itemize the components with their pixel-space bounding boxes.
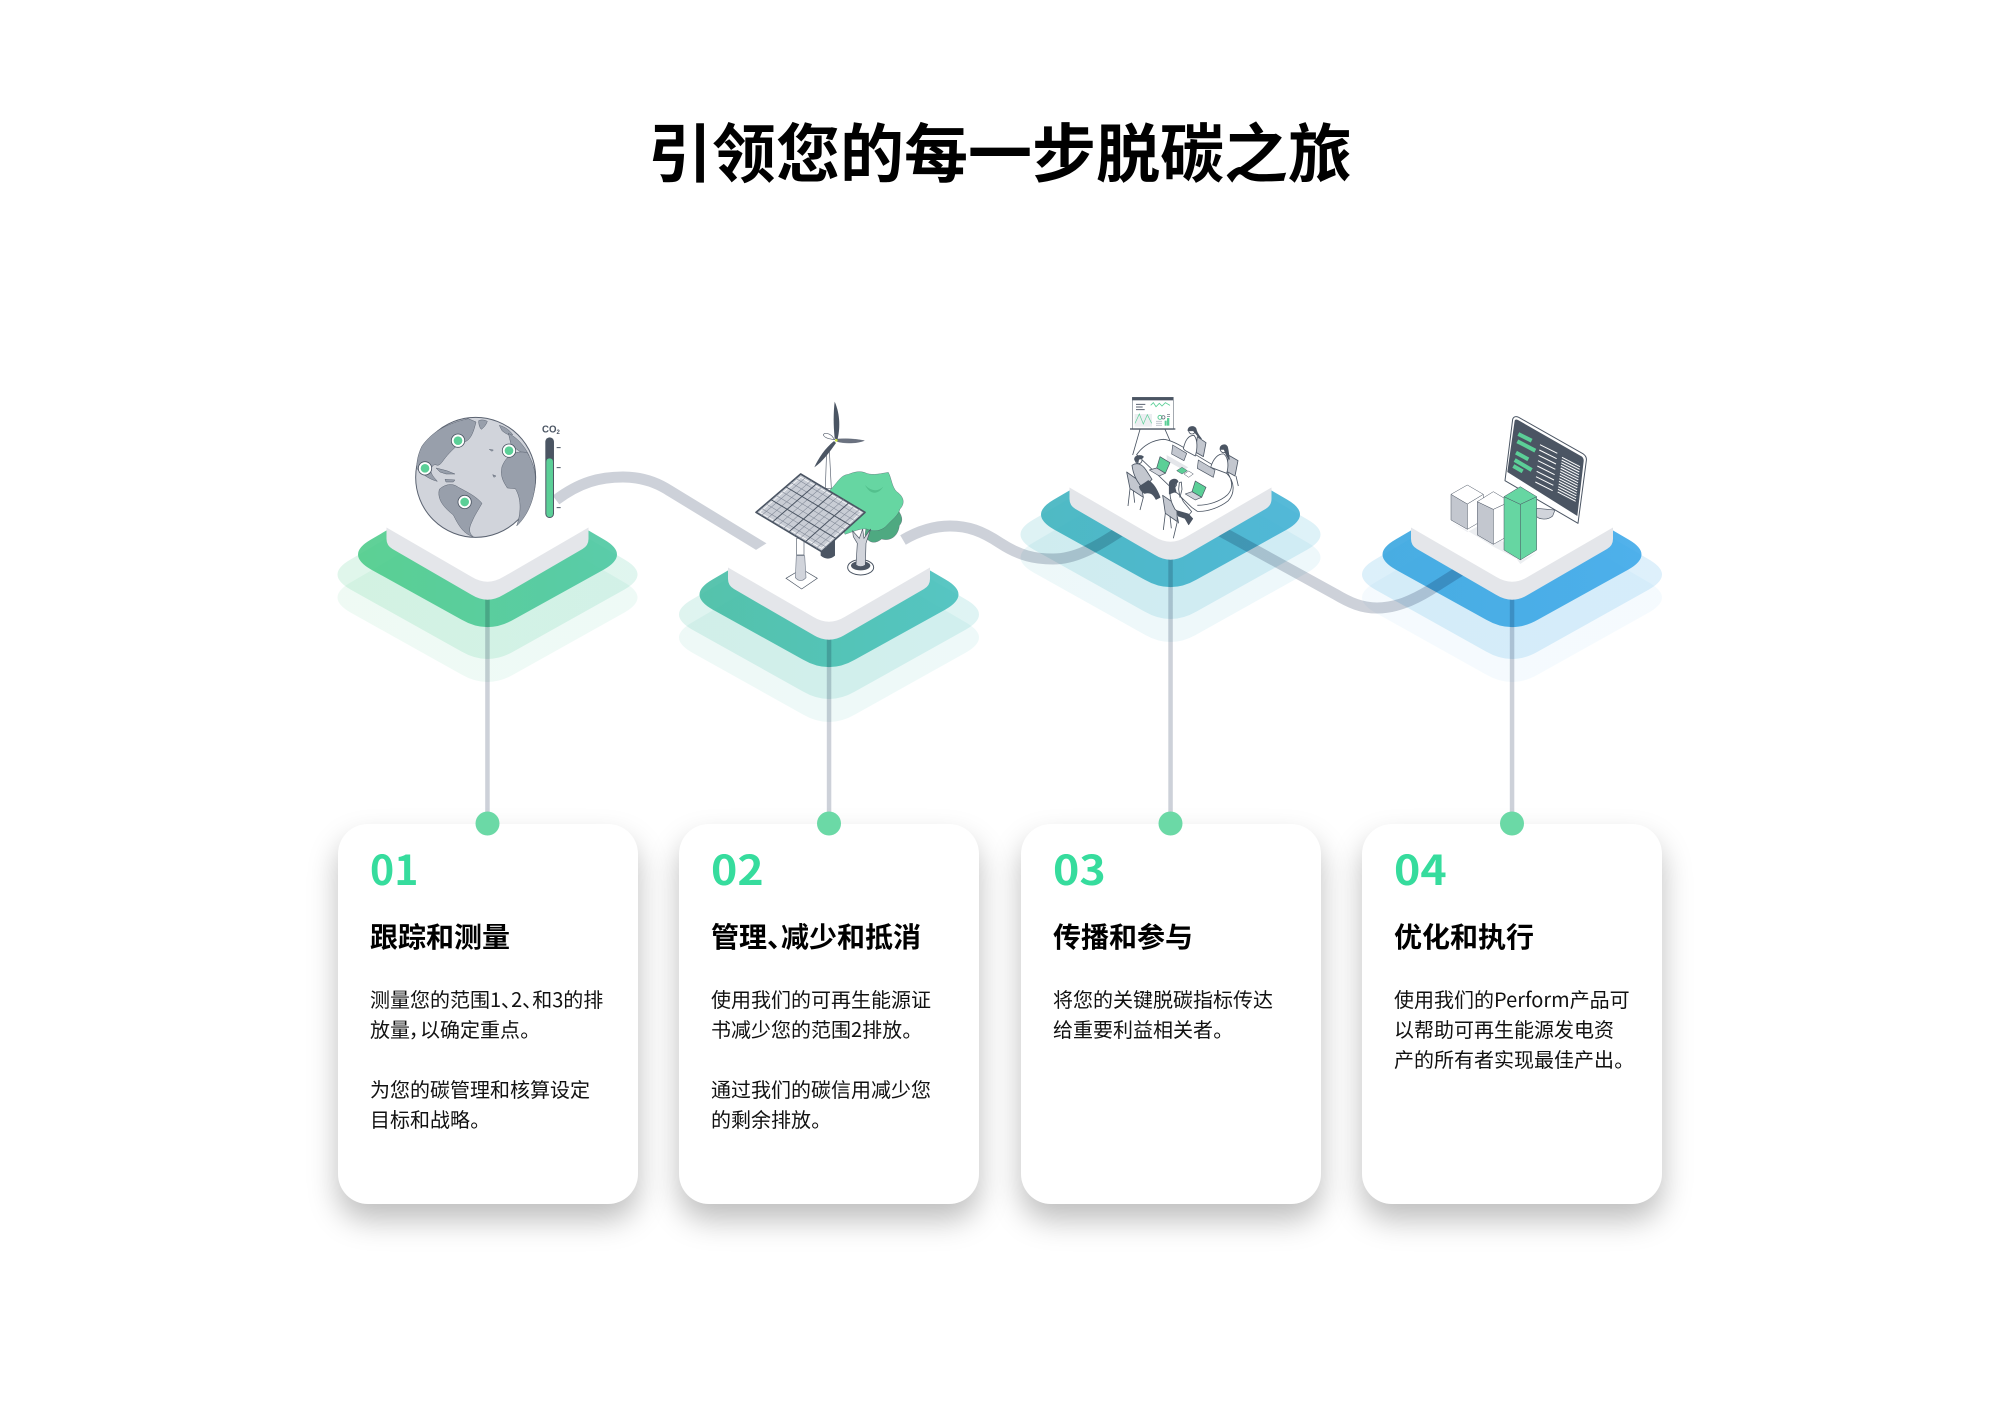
- step number 01: 01: [370, 837, 418, 897]
- step number 04: 04: [1394, 837, 1447, 897]
- chairs and people: [1127, 427, 1238, 538]
- step number 02: 02: [711, 837, 764, 897]
- platform base 4: [1362, 506, 1662, 682]
- bar 1: [1451, 485, 1483, 529]
- winding connector path between steps: [556, 477, 1490, 608]
- text block: step 04 description: 以帮助可再生能源发电资: [1394, 1014, 1614, 1043]
- platform top 3: [1070, 424, 1272, 560]
- panel: card 02: [679, 824, 979, 1204]
- step number 03: 03: [1053, 837, 1106, 897]
- text block: step 01 description: 测量您的范围1、2、和3的排: [370, 984, 603, 1013]
- turbine tower: [825, 450, 831, 488]
- monitor stand: [1537, 508, 1555, 519]
- platform base 3: [1020, 466, 1320, 642]
- title: 引领您的每一步脱碳之旅: [648, 104, 1352, 196]
- text block: step 01 description: [370, 984, 603, 1133]
- heading: communicate and engage: 传播和参与: [1053, 916, 1193, 956]
- heading: manage, reduce and offset: 管理、减少和抵消: [711, 916, 921, 956]
- solar stand: [786, 569, 817, 589]
- text block: step 04 description: 使用我们的Perform产品可: [1394, 984, 1630, 1013]
- node dot 1: [476, 812, 500, 836]
- notebooks on table: [1177, 467, 1193, 477]
- gauge: [545, 437, 561, 518]
- bar 2: [1477, 492, 1510, 544]
- text block: step 04 description: 产的所有者实现最佳产出。: [1394, 1044, 1624, 1073]
- laptops: [1149, 445, 1215, 500]
- CO2 label: CO: [542, 424, 556, 435]
- tree planter and trunk: [848, 560, 874, 575]
- node dot 2: [817, 812, 841, 836]
- monitor body: [1505, 417, 1586, 523]
- text block: step 02 description: 通过我们的碳信用减少您: [711, 1074, 931, 1103]
- screen green bars: [1513, 434, 1535, 471]
- platform top 4: [1411, 464, 1613, 600]
- icon: solar panel, wind turbine and tree: [756, 402, 903, 589]
- text block: step 03 description: [1053, 984, 1273, 1043]
- platform base 1: [338, 506, 638, 682]
- text block: step 02 description: 使用我们的可再生能源证: [711, 984, 931, 1013]
- meeting table: [1137, 439, 1233, 511]
- panel: card 04: [1362, 824, 1662, 1204]
- text block: step 03 description: 将您的关键脱碳指标传达: [1053, 984, 1273, 1013]
- platform top 2: [728, 504, 930, 640]
- text block: step 01 description: 目标和战略。: [370, 1104, 480, 1133]
- bar shadows: [1451, 522, 1537, 564]
- node dot 4: [1500, 812, 1524, 836]
- location pins: [418, 434, 516, 509]
- text block: step 04 description: [1394, 984, 1630, 1073]
- text block: step 02 description: [711, 984, 931, 1133]
- text block: step 02 description: 的剩余排放。: [711, 1104, 821, 1133]
- panel: card 01: [338, 824, 638, 1204]
- screen text lines: [1535, 445, 1557, 491]
- heading: optimise and execute: 优化和执行: [1394, 916, 1534, 956]
- solar panel: [756, 474, 865, 552]
- heading: track and measure: 跟踪和测量: [370, 916, 510, 956]
- tree: [865, 508, 902, 542]
- panel: card 03: [1021, 824, 1321, 1204]
- text block: step 02 description: 书减少您的范围2排放。: [711, 1014, 912, 1043]
- vertical stems to the cards: [485, 555, 1514, 823]
- text block: step 03 description: 给重要利益相关者。: [1053, 1014, 1223, 1043]
- presentation board: [1130, 397, 1175, 455]
- icon: globe with CO2 gauge: [416, 417, 561, 537]
- turbine blades: [834, 402, 839, 440]
- platform top 1: [386, 464, 588, 600]
- node dot 3: [1158, 812, 1182, 836]
- icon: team meeting with presentation board: [1127, 397, 1238, 538]
- platform base 2: [679, 546, 979, 722]
- screen striped block: [1558, 457, 1580, 501]
- text block: step 01 description: 放量，以确定重点。: [370, 1014, 530, 1043]
- CO2 label: 2: [556, 430, 560, 436]
- text block: step 01 description: 为您的碳管理和核算设定: [370, 1074, 590, 1103]
- bar 3: [1504, 487, 1537, 560]
- icon: data monitor and bar chart: [1451, 417, 1586, 564]
